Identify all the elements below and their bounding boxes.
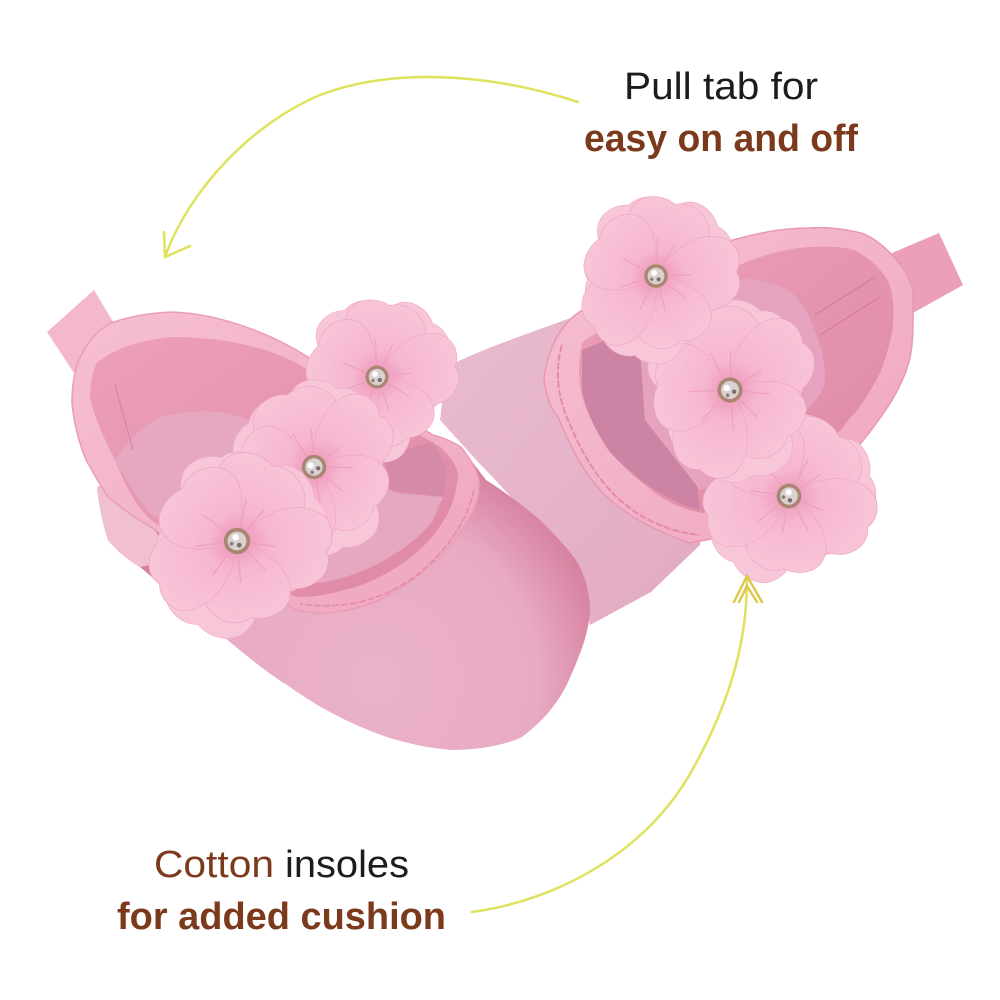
shoe: left (front) [47, 290, 590, 750]
pull tab: right shoe [892, 233, 963, 313]
flower: left shoe bottom [115, 411, 373, 673]
flower: left shoe top [286, 276, 480, 476]
line: easy on and off: easy on and off [584, 118, 858, 160]
shoe: right (rear) [440, 228, 963, 625]
flower: right shoe top [556, 167, 768, 384]
rim: right shoe [544, 228, 913, 543]
lining: left shoe [90, 337, 458, 597]
line: cotton insoles: insoles [285, 844, 409, 886]
flower: right shoe bottom [666, 369, 924, 627]
heel seam: left shoe [115, 385, 133, 450]
flowers: right shoe [556, 167, 924, 627]
lining: right shoe [579, 247, 894, 513]
arrow: pull tab [164, 77, 578, 257]
line: for added cushion: for added cushion [117, 896, 446, 938]
arrow: cotton insoles [472, 576, 762, 912]
line: pull tab for: Pull tab for [624, 66, 818, 108]
stitching: right shoe rim [558, 345, 700, 535]
heel seams: right shoe [815, 277, 880, 335]
upper: right shoe [440, 290, 720, 625]
rim: left shoe [72, 312, 479, 613]
text: pull tab label [584, 66, 858, 160]
front cavity: right shoe [582, 340, 700, 510]
front cavity: left shoe [385, 442, 447, 497]
line: cotton insoles: Cotton [154, 844, 274, 886]
flower: right shoe middle [622, 270, 849, 503]
insole: left shoe [115, 411, 443, 583]
insole: right shoe [640, 279, 825, 490]
flowers: left shoe [115, 276, 480, 673]
pull tab: left shoe [47, 290, 115, 373]
side panel: left shoe [97, 480, 175, 567]
text: cotton insoles label [117, 844, 446, 938]
flower: left shoe middle [204, 346, 434, 580]
stitching: left shoe rim [300, 490, 474, 606]
upper: left shoe [97, 447, 590, 750]
